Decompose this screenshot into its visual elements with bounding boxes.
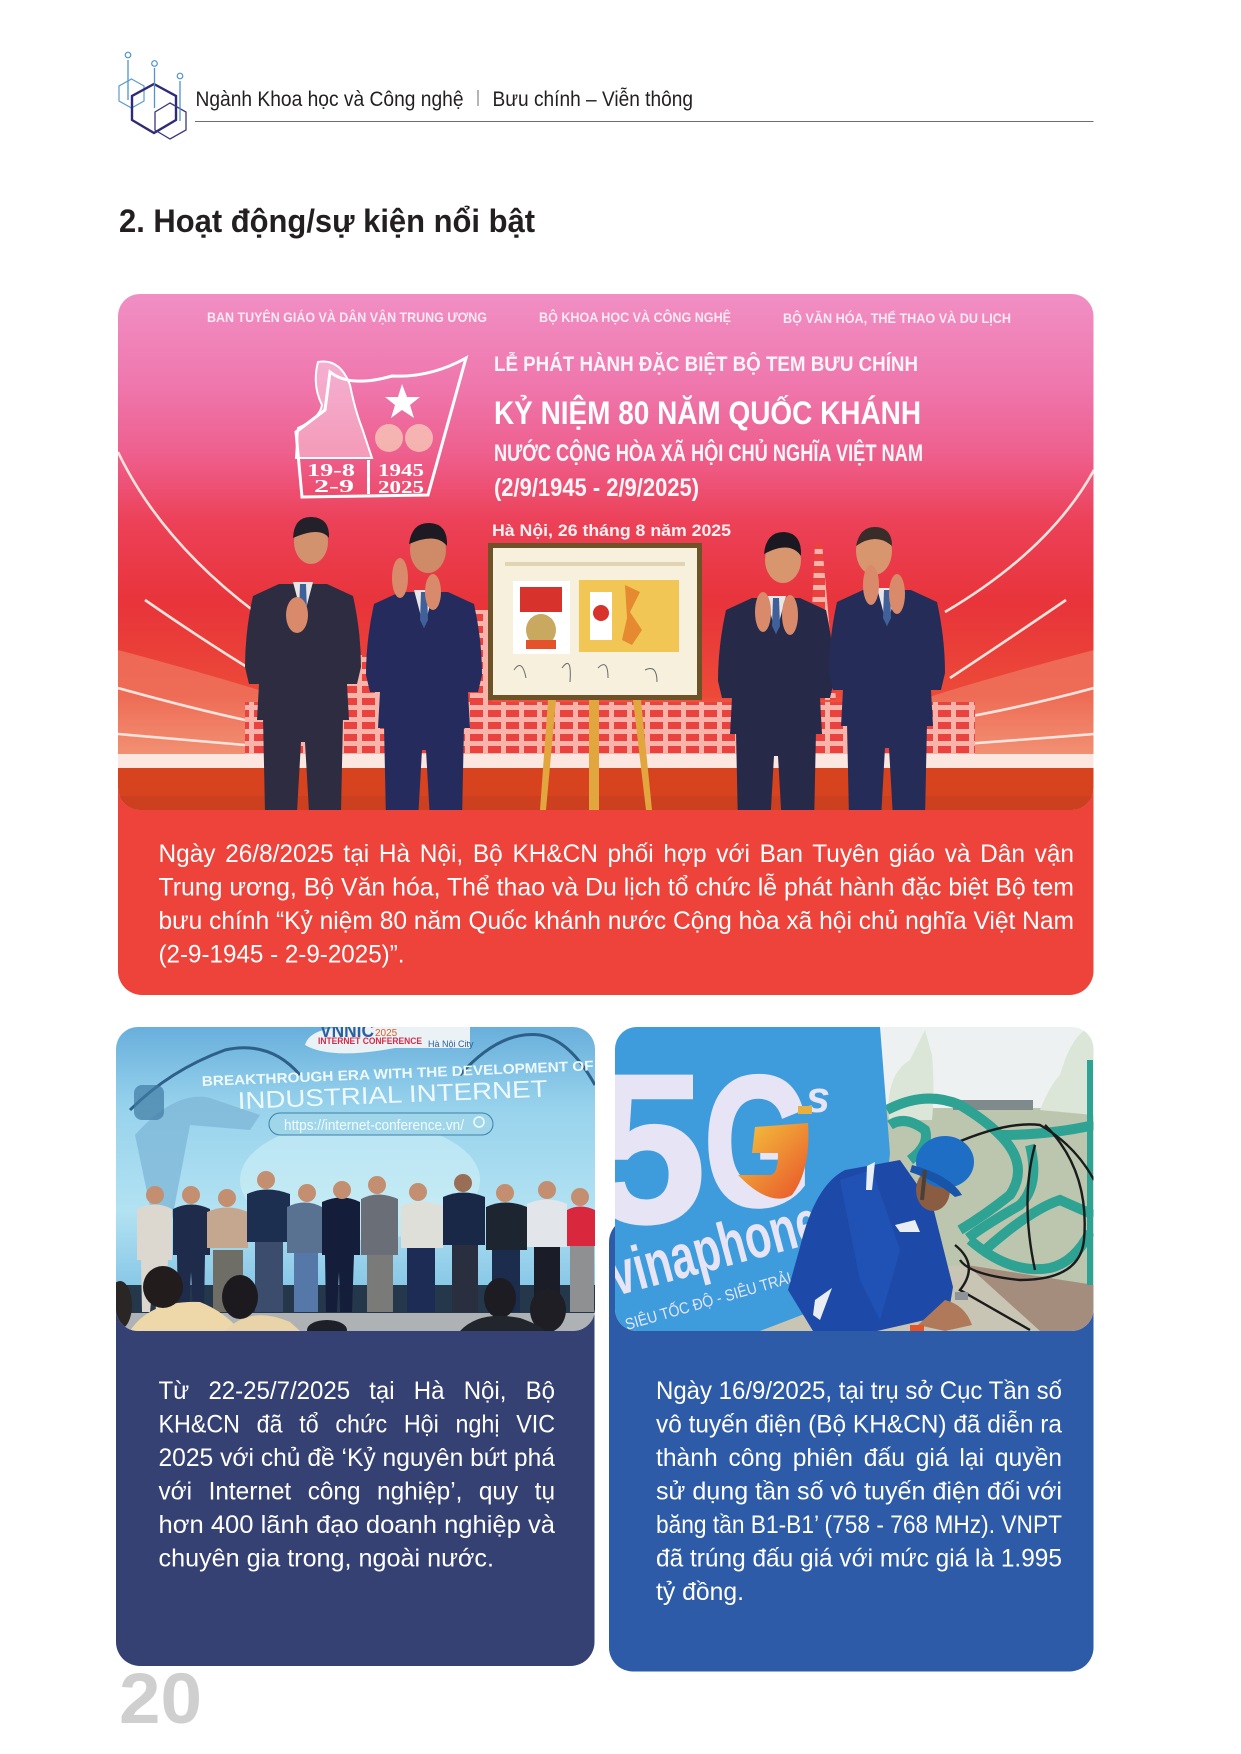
screen url pill [269, 1113, 493, 1135]
caption: VIC 2025: KH&CN đã tổ chức Hội nghị VIC [158, 1410, 555, 1438]
stage arcs [118, 452, 1094, 745]
photo: stamp release ceremony [118, 294, 1094, 826]
screen title [202, 1060, 593, 1109]
header running title: Ngành Khoa học và Công nghệ [196, 88, 464, 111]
panel: spectrum auction [588, 1027, 1094, 1672]
photo: 5G engineer by the lake [588, 1027, 1094, 1334]
caption: stamp release [158, 840, 1074, 968]
backdrop event title [492, 352, 923, 540]
backdrop event title: NƯỚC CỘNG HÒA XÃ HỘI CHỦ NGHĨA VIỆT NAM [494, 438, 923, 467]
person 1 [245, 517, 361, 812]
city silhouette backdrop [245, 543, 975, 754]
caption: spectrum auction: Ngày 16/9/2025, tại trụ sở Cục Tần số [656, 1377, 1062, 1405]
screen logo [305, 1027, 474, 1054]
dragon statues [888, 1030, 1094, 1120]
banner lettering: 5 [588, 1030, 706, 1267]
caption: spectrum auction: tỷ đồng. [656, 1578, 744, 1606]
caption: spectrum auction: đã trúng đấu giá với mức giá là 1.995 [656, 1544, 1062, 1572]
backdrop 80th anniversary emblem: 1945 [378, 460, 424, 480]
caption: stamp release: Trung ương, Bộ Văn hóa, Thể thao và Du lịch tổ chức lễ phát hành đặc biệt Bộ tem [158, 872, 1074, 902]
caption: VIC 2025: với Internet công nghiệp’, quy tụ [158, 1478, 555, 1506]
photo: conference stage [108, 1021, 595, 1340]
header running title [195, 88, 1094, 122]
banner lettering: s [806, 1073, 830, 1122]
orange G mark [738, 1123, 808, 1199]
caption: VIC 2025: 2025 với chủ đề ‘Kỷ nguyên bứt phá [158, 1444, 555, 1472]
blue caption panel [609, 1218, 1094, 1672]
header logo: hexagons and pins [119, 52, 186, 139]
vinaphone banner [615, 1027, 890, 1331]
backdrop event title: KỶ NIỆM 80 NĂM QUỐC KHÁNH [494, 395, 921, 431]
caption: VIC 2025 [158, 1377, 555, 1572]
caption: VIC 2025: Từ 22-25/7/2025 tại Hà Nội, Bộ [158, 1377, 555, 1405]
audience heads in foreground [116, 1266, 566, 1331]
page number: 20 [119, 1660, 202, 1739]
caption: stamp release: bưu chính “Kỷ niệm 80 năm Quốc khánh nước Cộng hòa xã hội chủ nghĩa Việt Nam [158, 907, 1074, 935]
caption: spectrum auction: thành công phiên đấu giá lại quyền [656, 1444, 1062, 1472]
backdrop 80th anniversary emblem: 2025 [378, 477, 424, 497]
caption: stamp release: Ngày 26/8/2025 tại Hà Nội, Bộ KH&CN phối hợp với Ban Tuyên giáo và Dân vận [158, 840, 1074, 868]
page canvas [116, 52, 1094, 1724]
black cables [954, 1123, 1094, 1331]
red caption panel [118, 600, 1094, 995]
backdrop top organisers: BỘ VĂN HÓA, THỂ THAO VÀ DU LỊCH [783, 309, 1011, 326]
group of twelve delegates [137, 1171, 595, 1312]
teal railing [887, 1060, 1094, 1285]
backdrop event title: Hà Nội, 26 tháng 8 năm 2025 [492, 521, 731, 540]
panel: stamp release event [118, 294, 1094, 995]
backdrop top organisers: BAN TUYÊN GIÁO VÀ DÂN VẬN TRUNG ƯƠNG [207, 308, 487, 325]
caption: spectrum auction: vô tuyến điện (Bộ KH&CN) đã diễn ra [656, 1410, 1062, 1438]
backdrop 80th anniversary emblem [296, 358, 466, 497]
screen logo: VNNIC [320, 1021, 374, 1042]
caption: spectrum auction: băng tần B1-B1’ (758 - 768 MHz). VNPT [656, 1511, 1062, 1539]
caption: spectrum auction: sử dụng tần số vô tuyến điện đối với [656, 1478, 1062, 1506]
backdrop top organisers: BỘ KHOA HỌC VÀ CÔNG NGHỆ [539, 308, 731, 325]
screen title: BREAKTHROUGH ERA WITH THE DEVELOPMENT OF [201, 1057, 594, 1089]
panel: VIC 2025 conference [108, 1021, 595, 1666]
screen url pill: https://internet-conference.vn/ [284, 1117, 465, 1134]
caption: VIC 2025: chuyên gia trong, ngoài nước. [158, 1544, 494, 1572]
backdrop 80th anniversary emblem: 2-9 [314, 476, 354, 496]
caption: VIC 2025: hơn 400 lãnh đạo doanh nghiệp và [158, 1511, 555, 1539]
screen logo: 2025 [375, 1028, 398, 1039]
navy caption panel [116, 1200, 594, 1666]
banner lettering: SIÊU TỐC ĐỘ - SIÊU TRẢI [623, 1267, 793, 1334]
person 3 [718, 532, 834, 826]
backdrop event title: (2/9/1945 - 2/9/2025) [494, 474, 699, 502]
backdrop event title: LỄ PHÁT HÀNH ĐẶC BIỆT BỘ TEM BƯU CHÍNH [494, 352, 918, 376]
person 2 [366, 523, 482, 820]
banner lettering: vinaphone [602, 1187, 827, 1310]
backdrop top organisers [207, 308, 1011, 326]
screen title: INDUSTRIAL INTERNET [237, 1076, 548, 1115]
caption: stamp release: (2-9-1945 - 2-9-2025)”. [158, 940, 404, 968]
screen logo: Hà Nội City [428, 1039, 474, 1049]
caption: spectrum auction [656, 1377, 1062, 1606]
person 4 [829, 527, 945, 818]
engineer in blue uniform [788, 1136, 974, 1331]
banner lettering: G [704, 1039, 812, 1245]
header running title: Bưu chính – Viễn thông [492, 88, 693, 111]
screen logo: INTERNET CONFERENCE [318, 1036, 422, 1046]
banner lettering [615, 1074, 828, 1330]
section heading: 2. Hoạt động/sự kiện nổi bật [119, 203, 535, 239]
framed stamp set on easel [488, 543, 702, 810]
backdrop 80th anniversary emblem: 19-8 [307, 460, 355, 480]
